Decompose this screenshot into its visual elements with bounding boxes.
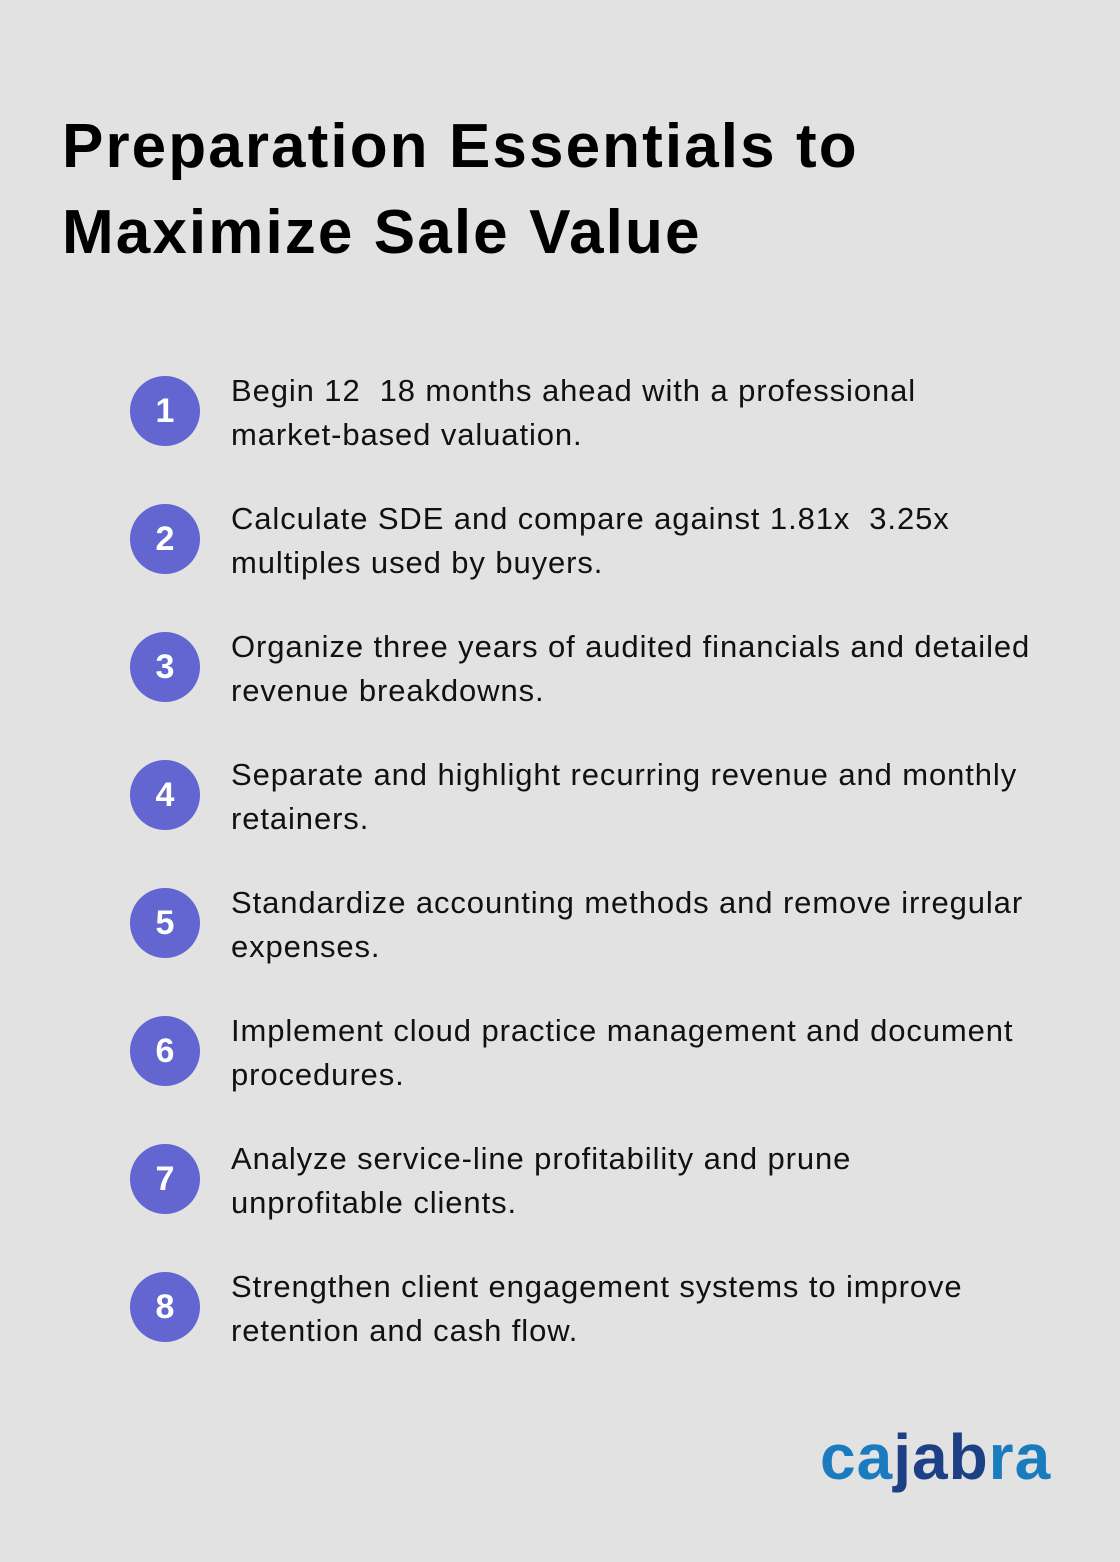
item 4: Separate and highlight recurring revenue and monthly	[231, 757, 1017, 792]
item 7: unprofitable clients.	[231, 1185, 517, 1220]
item 1: Begin 12 18 months ahead with a professional	[231, 373, 916, 408]
item 2: Calculate SDE and compare against 1.81x 3.25x	[231, 501, 950, 536]
item 4: 4	[156, 776, 174, 814]
item 5	[130, 885, 1023, 964]
item 5: 5	[156, 904, 174, 942]
item 2: multiples used by buyers.	[231, 545, 603, 580]
item 8: Strengthen client engagement systems to improve	[231, 1269, 963, 1304]
item 4	[130, 757, 1017, 836]
logo: cajabra	[820, 1421, 1051, 1493]
item 8: 8	[156, 1288, 174, 1326]
item 2: 2	[156, 520, 174, 558]
item 1	[130, 373, 916, 452]
item 5: Standardize accounting methods and remove irregular	[231, 885, 1023, 920]
title: Maximize Sale Value	[62, 198, 702, 267]
title	[62, 112, 859, 267]
item 8	[130, 1269, 963, 1348]
item 1: market-based valuation.	[231, 417, 583, 452]
item 5: expenses.	[231, 929, 380, 964]
item 8: retention and cash flow.	[231, 1313, 578, 1348]
item 3: 3	[156, 648, 174, 686]
item 6	[130, 1013, 1013, 1092]
item 7: Analyze service-line profitability and prune	[231, 1141, 851, 1176]
item 6: 6	[156, 1032, 174, 1070]
item 6: procedures.	[231, 1057, 405, 1092]
item 3	[130, 629, 1030, 708]
item 7: 7	[156, 1160, 174, 1198]
item 7	[130, 1141, 851, 1220]
title: Preparation Essentials to	[62, 112, 859, 181]
item 6: Implement cloud practice management and document	[231, 1013, 1013, 1048]
item 4: retainers.	[231, 801, 369, 836]
item 3: Organize three years of audited financials and detailed	[231, 629, 1030, 664]
item 2	[130, 501, 950, 580]
item 1: 1	[156, 392, 174, 430]
item 3: revenue breakdowns.	[231, 673, 545, 708]
